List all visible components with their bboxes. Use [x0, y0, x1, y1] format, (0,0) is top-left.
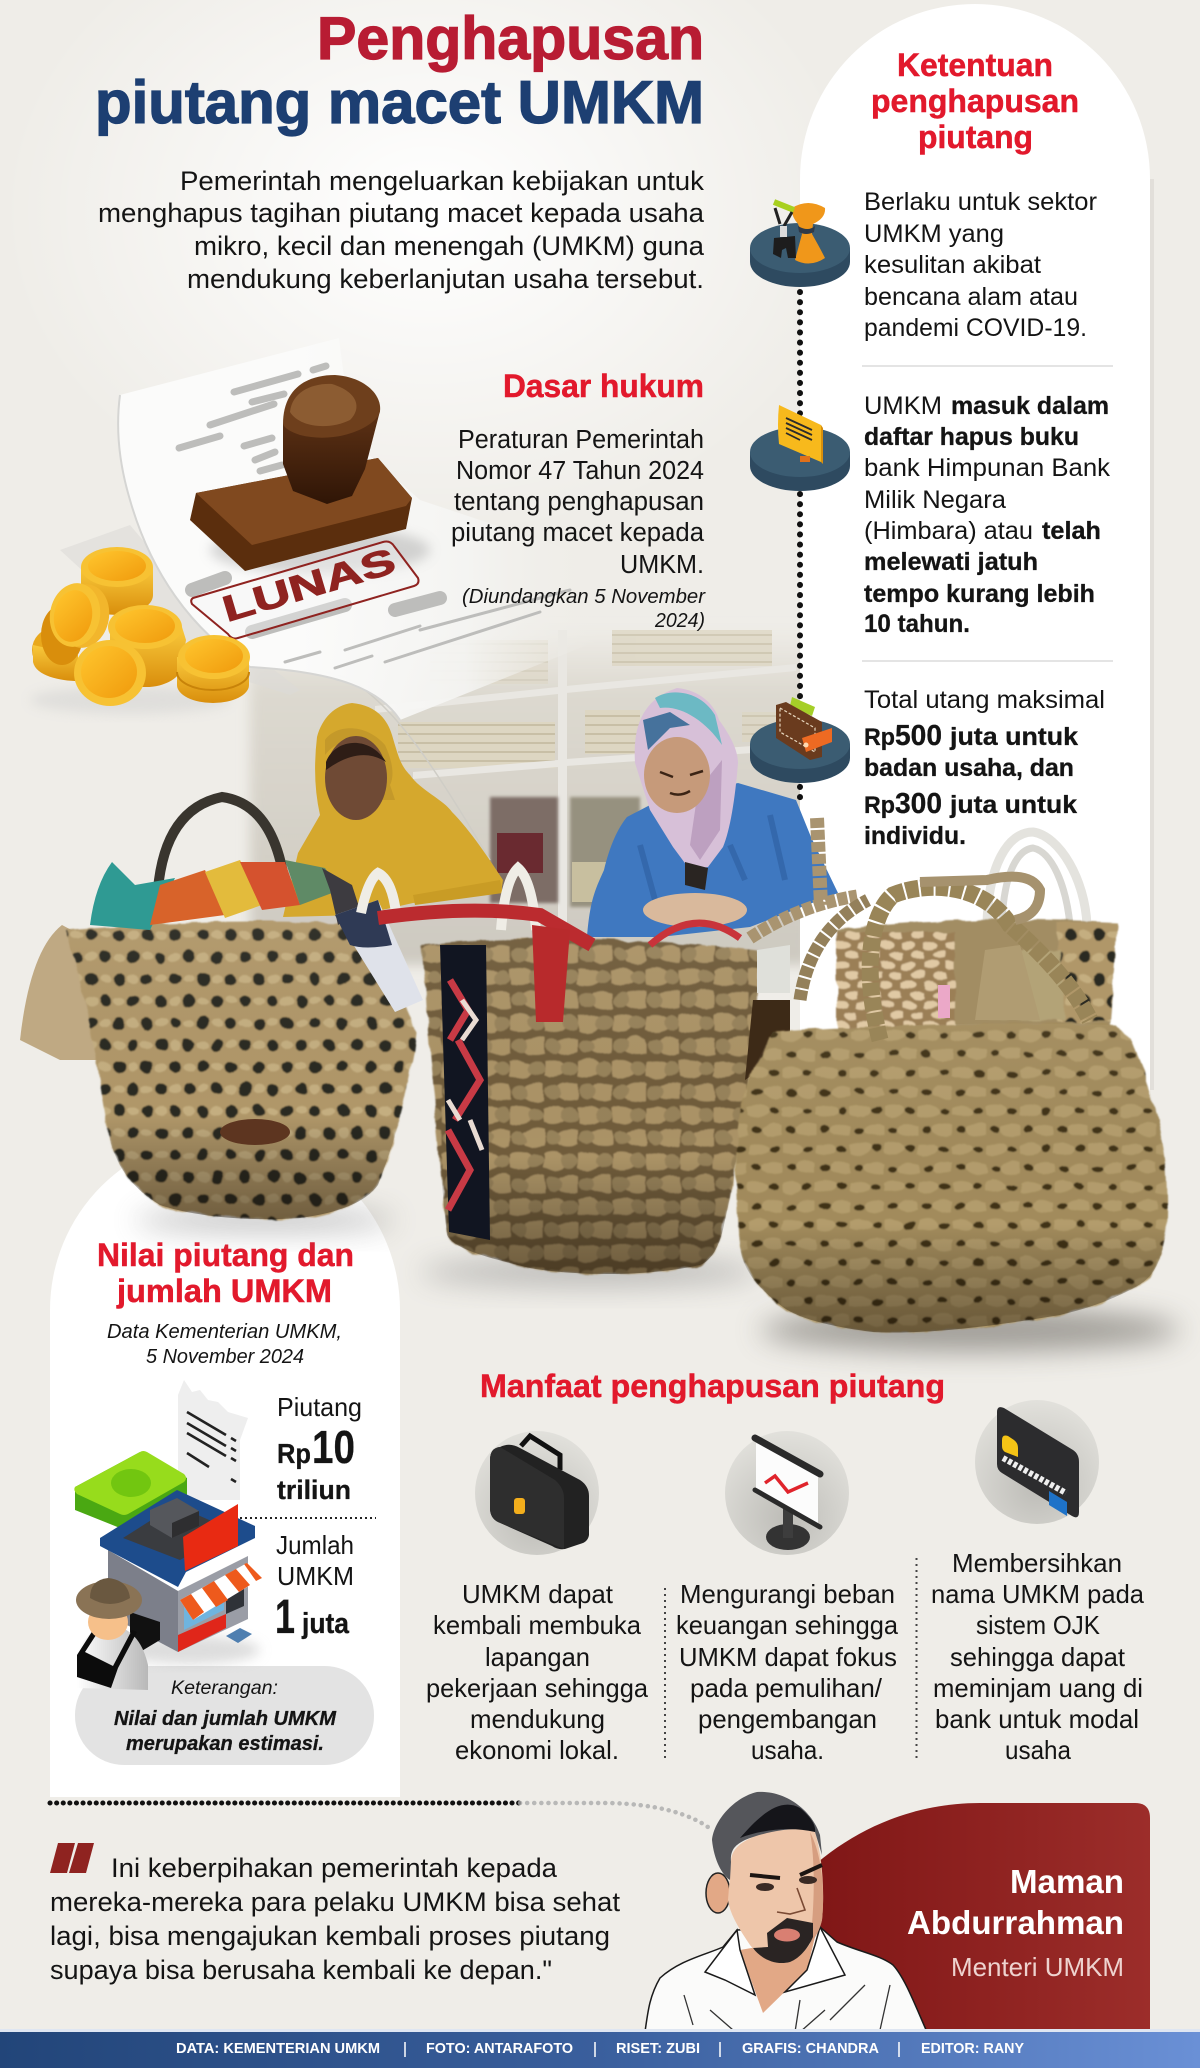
receipt: [178, 1380, 248, 1500]
footer credits bar: DATA: KEMENTERIAN UMKM: [176, 2040, 380, 2057]
right front basket: [736, 877, 1168, 1333]
stat: piutang Rp10 triliun: triliun: [277, 1475, 351, 1505]
icon: yellow certificate on platform: [750, 405, 850, 491]
intro paragraph: menghapus tagihan piutang macet kepada usaha: [98, 198, 705, 228]
benefit 1 text: [426, 1579, 649, 1765]
panel: dasar hukum: Dasar hukum: [503, 368, 704, 404]
stat: piutang Rp10 triliun: 10: [312, 1421, 355, 1473]
heading: penghapusan: [871, 83, 1079, 119]
condition 2 text: bank Himpunan Bank: [864, 454, 1111, 482]
panel: dasar hukum: tentang penghapusan: [454, 488, 704, 516]
callout: keterangan: Keterangan:: [171, 1678, 278, 1699]
portrait: Maman Abdurrahman: [645, 1792, 927, 2032]
stat: jumlah UMKM 1 juta: UMKM: [277, 1561, 354, 1591]
condition 1 text: Berlaku untuk sektor: [864, 188, 1097, 216]
icon: craft tools on platform: [750, 202, 850, 287]
stat: jumlah UMKM 1 juta: juta: [301, 1608, 350, 1640]
benefit 3 text: sehingga dapat: [950, 1642, 1126, 1672]
condition 3 text: juta untuk: [949, 791, 1077, 819]
heading: Ketentuan: [897, 47, 1053, 83]
benefit 2 text: Mengurangi beban: [680, 1579, 895, 1609]
panel: dasar hukum: (Diundangkan 5 November: [462, 586, 706, 608]
condition 2 text: UMKM: [864, 392, 942, 420]
middle basket with red handles: [361, 868, 758, 1274]
stat: jumlah UMKM 1 juta: Jumlah: [276, 1530, 354, 1560]
woman in yellow hijab: [283, 703, 503, 917]
condition 2 text: masuk dalam: [951, 392, 1109, 420]
footer credits bar: RISET: ZUBI: [616, 2040, 700, 2057]
stat: piutang Rp10 triliun: [277, 1392, 362, 1505]
condition 2 text: daftar hapus buku: [864, 423, 1079, 451]
benefit 1 text: UMKM dapat: [462, 1579, 614, 1609]
panel: dasar hukum: [451, 368, 706, 632]
benefit 1 text: mendukung: [470, 1704, 605, 1734]
benefit 3 text: usaha: [1005, 1735, 1071, 1765]
heading: jumlah UMKM: [116, 1273, 332, 1309]
stat: piutang Rp10 triliun: Rp: [277, 1438, 311, 1469]
condition 1 text: bencana alam atau: [864, 283, 1078, 311]
stat: jumlah UMKM 1 juta: 1: [275, 1591, 295, 1644]
title: piutang macet UMKM: [95, 69, 704, 136]
photo: two women weaving: [283, 688, 838, 937]
callout: keterangan: merupakan estimasi.: [126, 1733, 324, 1755]
intro paragraph: mendukung keberlanjutan usaha tersebut.: [187, 264, 704, 294]
gold coins: [30, 547, 250, 714]
title: [95, 5, 704, 136]
condition 2 text: Milik Negara: [864, 486, 1006, 514]
illustration: receipt, money, shop and owner: [74, 1380, 262, 1690]
benefit 3 text: nama UMKM pada: [931, 1579, 1145, 1609]
panel: dasar hukum: piutang macet kepada: [451, 519, 705, 547]
panel: speaker name: [780, 1803, 1150, 2032]
shop owner with hat: [76, 1578, 148, 1690]
callout: keterangan: Nilai dan jumlah UMKM: [114, 1708, 337, 1730]
condition 2 text: (Himbara) atau: [864, 517, 1033, 545]
condition 1 text: [864, 188, 1097, 342]
condition 2 text: telah: [1042, 517, 1101, 545]
heading: piutang: [918, 119, 1033, 155]
condition 3 text: individu.: [864, 822, 966, 850]
stat: piutang Rp10 triliun: Piutang: [277, 1392, 362, 1422]
benefit 1 text: kembali membuka: [433, 1610, 642, 1640]
benefit 2 text: keuangan sehingga: [676, 1610, 899, 1640]
footer credits bar: FOTO: ANTARAFOTO: [426, 2040, 573, 2057]
benefit 2 text: UMKM dapat fokus: [679, 1642, 897, 1672]
quote text: supaya bisa berusaha kembali ke depan.": [50, 1955, 552, 1985]
benefit 3 text: [931, 1548, 1145, 1765]
intro paragraph: mikro, kecil dan menengah (UMKM) guna: [194, 231, 705, 261]
paper document: [60, 338, 600, 720]
illustration: paper, stamp and coins: [30, 338, 600, 720]
benefit 2 text: pengembangan: [698, 1704, 877, 1734]
panel: speaker name: Abdurrahman: [907, 1904, 1124, 1941]
benefit 2 text: pada pemulihan/: [690, 1673, 883, 1703]
left basket with colorful scarf: [20, 797, 423, 1219]
intro paragraph: [98, 166, 705, 294]
woman in blue shirt: [587, 688, 838, 937]
condition 3 text: 500: [895, 720, 942, 752]
benefit 3 text: meminjam uang di: [933, 1673, 1143, 1703]
condition 3 text: juta untuk: [949, 723, 1078, 751]
photo: woven water-hyacinth baskets: [20, 797, 1180, 1352]
condition 1 text: UMKM yang: [864, 220, 1004, 248]
data source: [107, 1321, 342, 1368]
chart heading: manfaat penghapusan piutang: Manfaat penghapusan piutang: [480, 1368, 945, 1404]
benefit 3 text: sistem OJK: [976, 1610, 1101, 1640]
condition 3 text: badan usaha, dan: [864, 754, 1074, 782]
heading: Nilai piutang dan: [97, 1237, 354, 1273]
footer credits bar: [0, 2029, 1200, 2068]
benefit 3: icon credit card: [975, 1400, 1099, 1524]
benefit 1 text: ekonomi lokal.: [455, 1735, 619, 1765]
heading: [97, 1237, 354, 1309]
condition 3 text: Total utang maksimal: [864, 686, 1105, 714]
condition 3 text: Rp: [864, 724, 895, 751]
footer credits bar: EDITOR: RANY: [921, 2040, 1024, 2057]
condition 1 text: kesulitan akibat: [864, 251, 1041, 279]
panel: dasar hukum: UMKM.: [620, 551, 704, 579]
condition 1 text: pandemi COVID-19.: [864, 314, 1087, 342]
rubber stamp: [190, 375, 430, 574]
stat: jumlah UMKM 1 juta: [275, 1530, 354, 1644]
condition 2 text: 10 tahun.: [864, 610, 970, 638]
callout: keterangan: [75, 1666, 374, 1765]
footer credits bar: GRAFIS: CHANDRA: [742, 2040, 879, 2057]
condition 2 text: [864, 392, 1111, 638]
panel: ketentuan penghapusan piutang: [750, 4, 1154, 1095]
benefit 3 text: bank untuk modal: [935, 1704, 1139, 1734]
condition 2 text: tempo kurang lebih: [864, 580, 1095, 608]
condition 3 text: Rp: [864, 792, 895, 819]
condition 3 text: [864, 686, 1105, 850]
stack of money: [74, 1451, 187, 1532]
shop building: [100, 1490, 262, 1664]
photo background: craft shop shelves: [250, 625, 810, 965]
panel: dasar hukum: 2024): [654, 610, 705, 632]
benefit 1 text: pekerjaan sehingga: [426, 1673, 649, 1703]
title: Penghapusan: [317, 5, 704, 72]
condition 3 text: 300: [895, 788, 942, 820]
icon: brown wallet on platform: [750, 697, 850, 783]
intro paragraph: Pemerintah mengeluarkan kebijakan untuk: [180, 166, 704, 196]
panel: dasar hukum: Peraturan Pemerintah: [458, 426, 704, 454]
panel: dasar hukum: Nomor 47 Tahun 2024: [456, 457, 704, 485]
condition 2 text: melewati jatuh: [864, 548, 1038, 576]
quote text: Ini keberpihakan pemerintah kepada: [111, 1853, 558, 1883]
quote text: [50, 1853, 621, 1985]
back basket: [750, 818, 1117, 1030]
colorful scarf: [90, 860, 360, 930]
benefit 2 text: usaha.: [751, 1735, 824, 1765]
benefit 3 text: Membersihkan: [952, 1548, 1122, 1578]
LUNAS mark: LUNAS: [218, 540, 400, 630]
heading: [871, 47, 1079, 155]
ikat band: [440, 945, 490, 1240]
LUNAS mark: [191, 540, 418, 638]
data source: Data Kementerian UMKM,: [107, 1321, 342, 1343]
benefit 2: icon presentation board: [725, 1431, 849, 1555]
benefit 1: icon briefcase: [475, 1431, 599, 1555]
quote mark: [50, 1843, 94, 1873]
data source: 5 November 2024: [146, 1346, 304, 1368]
panel: nilai piutang dan jumlah UMKM: [50, 1135, 400, 1797]
panel: speaker name: Menteri UMKM: [951, 1952, 1124, 1982]
quote text: mereka-mereka para pelaku UMKM bisa sehat: [50, 1887, 621, 1917]
benefit 2 text: [676, 1579, 899, 1765]
benefit 1 text: lapangan: [485, 1642, 590, 1672]
quote text: lagi, bisa mengajukan kembali proses piutang: [50, 1921, 610, 1951]
panel: speaker name: Maman: [1010, 1863, 1124, 1900]
